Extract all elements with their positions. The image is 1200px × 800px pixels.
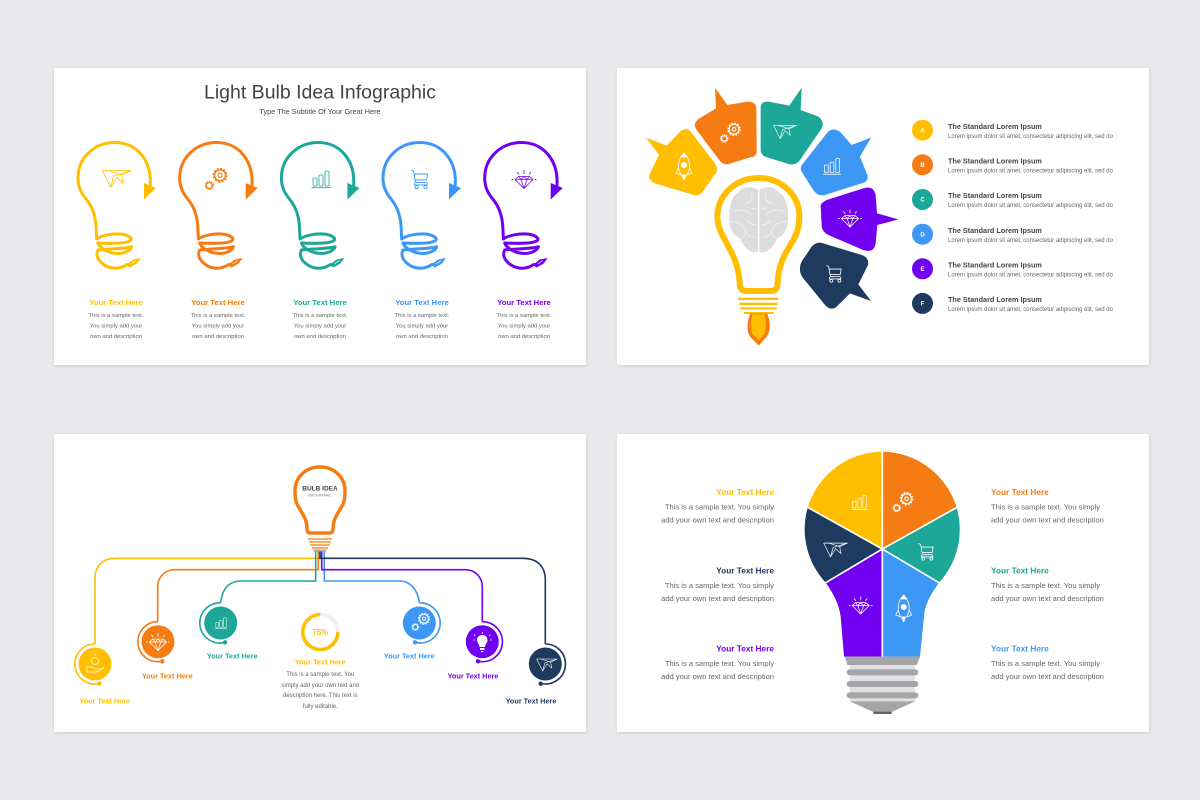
center text block: fully editable. [303, 704, 338, 710]
caption: purple: Your Text Here [497, 298, 551, 307]
flame [747, 314, 770, 346]
caption: yellow: This is a sample text. [89, 313, 144, 319]
node label: orange: Your Text Here [142, 672, 193, 681]
right text: blue: Your Text Here [991, 643, 1049, 653]
left text: purple: Your Text Here [716, 643, 774, 653]
panel: outline bulbs with arrows [54, 68, 586, 365]
left text: navy: add your own text and description [661, 594, 774, 603]
bubble: blue [801, 130, 871, 195]
list item C [912, 189, 1114, 210]
node: yellow [75, 644, 112, 686]
segment: orange [882, 452, 957, 549]
caption: purple [497, 298, 552, 340]
list item A: Lorem ipsum dolor sit amet, consectetur adipiscing elit, sed do [948, 134, 1114, 140]
segmented bulb graphic [805, 450, 960, 714]
list item A: A [920, 128, 925, 134]
list item B: B [920, 163, 925, 169]
list item E: Lorem ipsum dolor sit amet, consectetur adipiscing elit, sed do [948, 272, 1114, 278]
caption: orange [191, 298, 246, 340]
list item F: The Standard Lorem Ipsum [948, 295, 1042, 304]
right text: teal: Your Text Here [991, 565, 1049, 575]
segment: navy [805, 508, 882, 583]
bubble: purple [821, 187, 898, 251]
left text: yellow: add your own text and description [661, 516, 774, 525]
segment: blue [882, 549, 939, 657]
caption: yellow [89, 298, 144, 340]
right text: blue: This is a sample text. You simply [991, 659, 1100, 668]
caption: blue: This is a sample text. [395, 313, 450, 319]
progress ring 75% [303, 614, 338, 650]
bulb: yellow [78, 142, 156, 268]
bubble: navy [800, 243, 871, 309]
list item C: C [920, 198, 925, 204]
segment icons [824, 493, 933, 622]
bubble: yellow [646, 129, 717, 195]
brain bulb [717, 178, 799, 346]
left text: purple: add your own text and description [661, 672, 774, 681]
list item D: The Standard Lorem Ipsum [948, 226, 1042, 235]
caption: yellow: Your Text Here [89, 298, 143, 307]
node: teal [200, 603, 237, 644]
speech bubbles [646, 88, 898, 309]
caption: yellow: own and description [90, 334, 142, 340]
node label: yellow: Your Text Here [79, 697, 130, 706]
list item E: The Standard Lorem Ipsum [948, 260, 1042, 270]
list item B: The Standard Lorem Ipsum [948, 156, 1042, 166]
caption: teal: own and description [294, 334, 346, 340]
caption: teal [293, 298, 348, 340]
caption: blue: You simply add your [396, 323, 448, 329]
node label: teal: Your Text Here [207, 651, 258, 660]
list item A [912, 120, 1114, 141]
node: orange [138, 622, 174, 664]
right text: teal [991, 565, 1104, 603]
central bulb [295, 467, 345, 552]
left text: yellow: Your Text Here [716, 487, 774, 497]
caption: purple: You simply add your [498, 323, 550, 329]
bulb sublabel: INFOGRAPHIC [309, 494, 332, 498]
bubble icons [676, 123, 862, 282]
right text: orange: Your Text Here [991, 487, 1049, 497]
panel: bulb connector diagram [54, 434, 586, 732]
list item C: The Standard Lorem Ipsum [948, 191, 1042, 200]
caption: orange: own and description [192, 334, 244, 340]
title: Light Bulb Idea Infographic [204, 82, 436, 104]
left text: yellow: This is a sample text. You simply [665, 503, 774, 512]
node: navy [529, 644, 565, 686]
center text block: This is a sample text. You [286, 672, 354, 678]
caption: teal: You simply add your [294, 323, 346, 329]
brain [729, 187, 788, 252]
bulb: purple [485, 142, 563, 268]
caption: blue [395, 298, 450, 340]
caption: orange: You simply add your [192, 323, 244, 329]
right text: blue: add your own text and description [991, 672, 1104, 681]
right text: orange: This is a sample text. You simply [991, 503, 1100, 512]
left text: navy: This is a sample text. You simply [665, 581, 774, 590]
left text: navy: Your Text Here [716, 565, 774, 575]
right text: blue [991, 643, 1104, 681]
list item C: Lorem ipsum dolor sit amet, consectetur adipiscing elit, sed do [948, 203, 1114, 209]
list item B: Lorem ipsum dolor sit amet, consectetur adipiscing elit, sed do [948, 168, 1114, 174]
bulb: blue [383, 142, 461, 268]
bulb: orange [180, 142, 258, 268]
list item D: Lorem ipsum dolor sit amet, consectetur adipiscing elit, sed do [948, 238, 1114, 244]
bubble: orange [695, 88, 757, 164]
caption: orange: Your Text Here [191, 298, 245, 307]
center text block: Your Text Here [295, 657, 346, 666]
bulb outline [717, 178, 799, 291]
node: blue [403, 603, 440, 644]
screw base [845, 657, 920, 714]
panel: segmented bulb [617, 434, 1149, 732]
caption: teal: This is a sample text. [293, 313, 348, 319]
node: purple [466, 622, 502, 664]
right text: teal: This is a sample text. You simply [991, 581, 1100, 590]
caption: teal: Your Text Here [293, 298, 347, 307]
left text: yellow [661, 487, 774, 525]
center text block: description here. This text is [283, 693, 358, 699]
right text: teal: add your own text and description [991, 594, 1104, 603]
left text: purple [661, 643, 774, 681]
caption: purple: own and description [498, 334, 550, 340]
left text: purple: This is a sample text. You simply [665, 659, 774, 668]
node label: purple: Your Text Here [448, 672, 498, 681]
caption: blue: own and description [396, 334, 448, 340]
caption: yellow: You simply add your [90, 323, 142, 329]
list item F [912, 293, 1114, 314]
right text: orange [991, 487, 1104, 525]
bulb: teal [281, 142, 359, 268]
caption: purple: This is a sample text. [497, 313, 552, 319]
caption: orange: This is a sample text. [191, 313, 246, 319]
panel: brain bulb with speech bubbles [617, 68, 1149, 365]
node label: blue: Your Text Here [384, 651, 435, 660]
segment: purple [826, 549, 882, 657]
subtitle: Type The Subtitle Of Your Great Here [259, 107, 381, 116]
center text block [281, 657, 359, 710]
progress ring 75%: 75% [312, 628, 328, 637]
list item E [912, 258, 1114, 279]
list item A: The Standard Lorem Ipsum [948, 122, 1042, 131]
caption: blue: Your Text Here [395, 298, 449, 307]
bulb label: BULB IDEA [302, 485, 338, 492]
bulb base bars [738, 298, 778, 314]
list item B [912, 154, 1114, 175]
right text: orange: add your own text and description [991, 516, 1104, 525]
list item F: F [921, 302, 925, 308]
list item E: E [920, 267, 925, 273]
bubble: teal [761, 88, 823, 164]
list item D: D [920, 232, 925, 238]
segment: teal [882, 508, 960, 583]
list item F: Lorem ipsum dolor sit amet, consectetur adipiscing elit, sed do [948, 307, 1114, 313]
list item D [912, 224, 1114, 245]
segment: yellow [808, 452, 882, 549]
connector lines [95, 550, 545, 644]
node label: navy: Your Text Here [506, 697, 556, 706]
center text block: simply add your own text and [281, 683, 359, 689]
left text: navy [661, 565, 774, 603]
